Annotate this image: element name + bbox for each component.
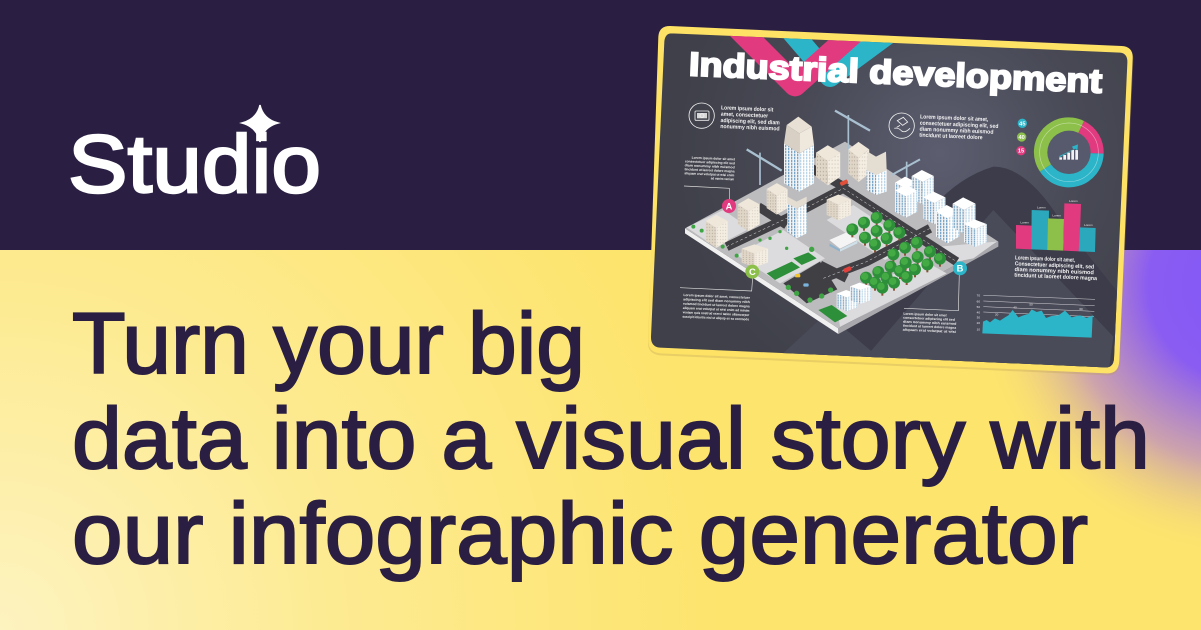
- headline: our infographic generator: [72, 486, 1088, 582]
- marker A: [684, 186, 736, 213]
- text block: top centre: [919, 114, 998, 140]
- text block: right: diam nonummy nibh euismod: [1014, 267, 1094, 276]
- logo: Studio: Studio: [68, 119, 321, 210]
- panel: infographic preview card: [640, 20, 1140, 387]
- headline: [72, 296, 1150, 582]
- legend dots: 45: [1019, 121, 1025, 127]
- legend dots: [1016, 119, 1027, 155]
- dark mountains backdrop: [783, 166, 1117, 368]
- tiny text: left upper: [684, 155, 736, 181]
- plaza building: [829, 233, 857, 252]
- text block: top left: amet, consectetuer: [721, 112, 769, 120]
- text block: top left: nonummy nibh euismod: [720, 124, 780, 132]
- tiny text: left lower: adipiscing elit sed diam nonummy nibh: [683, 297, 750, 304]
- chevron bands: [737, 27, 893, 85]
- text block: right: tincidunt ut laoreet dolore magna: [1014, 273, 1098, 282]
- city base: [685, 228, 838, 334]
- tiny text: left lower: [682, 293, 751, 321]
- cars: [795, 179, 852, 287]
- tiny text: left lower: Lorem ipsum dolor sit amet, consectetuer: [683, 293, 751, 300]
- tiny text: left lower: euismod tincidunt ut laoreet dolore magna: [683, 302, 750, 308]
- bar chart: Lorem: [1020, 221, 1029, 225]
- marker B: [904, 261, 967, 311]
- towers: [784, 117, 887, 238]
- text block: top centre: consectetuer adipiscing elit, sed: [920, 121, 999, 130]
- tiny text: centre lower: Lorem ipsum dolor sit amet: [903, 312, 948, 318]
- text block: top centre: tincidunt ut laoreet dolore: [919, 133, 983, 141]
- tiny text: left upper: diam nonummy nibh euismod: [685, 163, 735, 169]
- text block: top centre: Lorem ipsum dolor sit amet,: [920, 114, 989, 123]
- tiny text: left lower: aliquam erat volutpat ut wisi enim ad minim: [683, 306, 750, 313]
- area chart: 50: [1029, 302, 1033, 306]
- dark top background: [0, 0, 1201, 250]
- legend dots: 40: [1019, 135, 1025, 141]
- text block: top centre: diam nonummy nibh euismod: [919, 127, 994, 136]
- text block: top left: Lorem ipsum dolor sit: [721, 105, 774, 114]
- bar chart: [1016, 199, 1096, 252]
- headline: Turn your big: [72, 296, 585, 392]
- tiny text: centre lower: diam nonummy nibh euismod: [903, 320, 956, 326]
- bar chart: Lorem: [1069, 199, 1078, 203]
- hedges: [767, 252, 847, 322]
- area chart: 10: [977, 328, 980, 332]
- tiny text: centre lower: [903, 312, 957, 334]
- city roads: [727, 160, 957, 278]
- tiny text: centre lower: aliquam erat volutpat ut wisi: [903, 328, 956, 334]
- card title: Industrial development: [688, 46, 1103, 101]
- area chart: 60: [977, 300, 980, 304]
- icon: hand circle: [889, 113, 914, 138]
- tiny text: left upper: Lorem ipsum dolor sit amet: [692, 156, 736, 161]
- trees: [846, 212, 946, 296]
- card dark surface: [651, 33, 1128, 368]
- lower content in zoom coordinates: [680, 111, 1099, 338]
- area chart: 60: [1079, 307, 1083, 311]
- icon: sparkle star: [242, 105, 278, 142]
- yellow gradient lower background: [0, 250, 1201, 630]
- tiny text: centre lower: tincidunt ut laoreet dolore magna: [903, 324, 956, 330]
- bar chart: Lorem: [1052, 214, 1061, 218]
- tiny text: left lower: veniam quis nostrud exerci tation ullamcorper: [683, 310, 750, 317]
- tiny text: left upper: tincidunt ut laoreet dolore magna: [684, 167, 735, 173]
- tiny text: left upper: consectetuer adipiscing elit sed: [685, 159, 735, 165]
- area chart: 40: [977, 310, 980, 314]
- isometric city: [685, 111, 998, 334]
- road dashes: [727, 188, 957, 278]
- area chart: 50: [977, 305, 980, 309]
- text block: right: Lorem ipsum dolor sit amet,: [1015, 255, 1075, 264]
- tiny text: centre lower: consectetuer adipiscing elit sed: [903, 316, 955, 322]
- light plots: [687, 205, 997, 327]
- donut chart: [1034, 117, 1104, 187]
- cranes: [747, 111, 920, 185]
- area chart: 30: [977, 316, 980, 320]
- area chart: 20: [977, 321, 980, 325]
- text block: top left: [720, 106, 780, 130]
- parking lot: [783, 262, 837, 303]
- bar chart: Lorem: [1084, 223, 1093, 227]
- icon: money circle: [689, 103, 714, 128]
- small bushes: [691, 225, 833, 303]
- legend dots: 15: [1018, 149, 1024, 155]
- white blue blocks: [837, 170, 987, 311]
- marker B: B: [957, 264, 964, 274]
- beige buildings: [706, 142, 869, 267]
- icon: growth bars: [1059, 144, 1078, 160]
- area chart: 20: [995, 312, 999, 316]
- text block: right: [1014, 255, 1099, 282]
- text block: right: Consectetuer adipiscing elit, sed: [1015, 261, 1095, 271]
- area chart: [977, 294, 1095, 338]
- marker C: [680, 265, 759, 291]
- card yellow border: [648, 26, 1133, 373]
- headline: data into a visual story with: [72, 391, 1150, 487]
- marker A: A: [726, 201, 733, 211]
- tiny text: left lower: suscipit lobortis nisl ut aliquip ex ea commodo: [682, 315, 749, 321]
- marker C: C: [749, 267, 756, 277]
- tiny text: left upper: aliquam erat volutpat ut wisi enim: [684, 171, 734, 177]
- card shadow: [648, 28, 1133, 375]
- bar chart: Lorem: [1037, 205, 1046, 209]
- text block: top left: adipiscing elit, sed diam: [720, 118, 780, 126]
- area chart: 40: [1013, 305, 1017, 309]
- tiny text: left upper: ad minim veniam: [711, 176, 734, 181]
- area chart: 70: [977, 294, 980, 298]
